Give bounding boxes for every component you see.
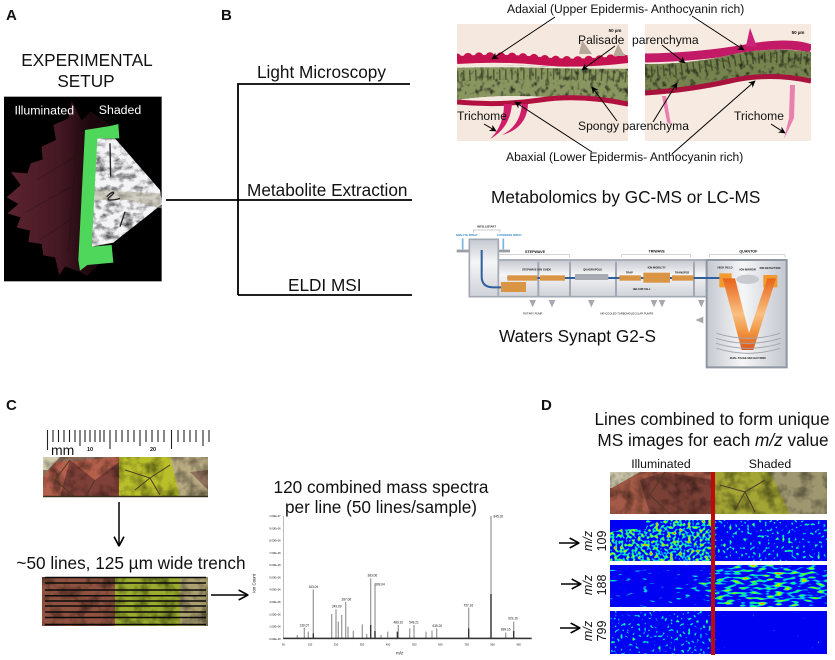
chart: mass spectrum: 7.00E+06	[269, 551, 281, 555]
chart: mass spectrum: 2.00E+06	[269, 612, 281, 616]
label: m/z 188: 188	[595, 575, 609, 595]
chart: mass spectrum: 757.16	[464, 603, 473, 607]
chart: mass spectrum: 350	[360, 642, 365, 646]
chart: mass spectrum: 9.00E+06	[269, 526, 281, 530]
chart: mass spectrum: 163.04	[309, 585, 318, 589]
scale bar right: 50 µm	[792, 30, 804, 35]
label: Waters Synapt G2-S: Waters Synapt G2-S	[499, 326, 656, 346]
label: shaded: Shaded	[749, 457, 791, 471]
heading: experimental setup: EXPERIMENTAL	[21, 50, 153, 70]
MS image m/z 188	[610, 565, 827, 607]
chart: mass spectrum	[252, 514, 532, 655]
label: m/z 188: m/z	[581, 574, 595, 595]
diagram: Waters Synapt G2-S instrument: STEPWAVE ION GUIDE	[522, 267, 551, 271]
diagram: Waters Synapt G2-S instrument: AIR-COOLED TURBOMOLECULAR PUMPS	[600, 312, 654, 316]
chart: mass spectrum: 850	[490, 642, 495, 646]
chart: mass spectrum: 1.00E+06	[269, 625, 281, 629]
chart: mass spectrum: 250	[334, 642, 339, 646]
micrograph annotation arrows	[484, 16, 785, 154]
micrograph annotation labels: Palisade	[578, 33, 625, 47]
ruler	[48, 430, 209, 458]
photo: half shaded leaf	[4, 97, 162, 281]
chart: mass spectrum: 750	[464, 642, 469, 646]
heading: lines combined: Lines combined to form unique	[594, 409, 830, 429]
diagram: Waters Synapt G2-S instrument: ION DETECTION	[760, 266, 780, 270]
ruler: 20	[150, 447, 156, 453]
heading: combined mass spectra: per line (50 lines/sample)	[285, 497, 477, 517]
chart: mass spectrum: 929.16	[508, 617, 518, 621]
panel label D: D	[541, 397, 552, 414]
chart: mass spectrum: 6.00E+06	[269, 563, 281, 567]
heading: combined mass spectra: 120 combined mass spectra	[274, 477, 489, 497]
diagram: Waters Synapt G2-S instrument: ROTARY PUMP	[523, 312, 542, 316]
diagram: Waters Synapt G2-S instrument: ION MIRROR	[740, 268, 756, 272]
diagram: Waters Synapt G2-S instrument: ANALYTE SPRAY	[456, 233, 478, 237]
ruler: 10	[87, 447, 93, 453]
ruler: mm	[51, 442, 74, 458]
photo: half shaded leaf: Illuminated	[15, 104, 74, 118]
diagram: Waters Synapt G2-S instrument: TRANSFER	[675, 270, 689, 274]
micrograph annotation labels: Trichome	[734, 109, 784, 123]
chart: mass spectrum: 1.00E+07	[269, 514, 281, 518]
chart: mass spectrum: 399.04	[375, 582, 385, 586]
chart: mass spectrum: 8.00E+06	[269, 539, 281, 543]
chart: mass spectrum: 383.06	[368, 573, 377, 577]
panel label C: C	[6, 397, 17, 414]
chart: mass spectrum: 130.07	[300, 624, 309, 628]
label: lines and trench width: ~50 lines, 125 µm wide trench	[16, 553, 246, 573]
diagram: Waters Synapt G2-S instrument: LOCKMASS SPRAY	[497, 233, 522, 237]
leaf section photo	[610, 472, 827, 514]
diagram: Waters Synapt G2-S instrument: QUANTOF	[739, 250, 758, 254]
ablated leaf section with trench lines	[42, 577, 208, 626]
diagram: Waters Synapt G2-S instrument: QUADRUPOLE	[583, 267, 602, 271]
label: m/z 109: 109	[595, 531, 609, 551]
label: illuminated: Illuminated	[631, 457, 691, 471]
MS image m/z 799	[610, 611, 827, 654]
diagram: Waters Synapt G2-S instrument: TRAP	[626, 270, 633, 274]
panel label B: B	[221, 7, 232, 24]
chart: mass spectrum: 650	[438, 642, 443, 646]
label: light microscopy: Light Microscopy	[257, 62, 386, 82]
chart: mass spectrum: 899.16	[501, 628, 511, 632]
chart: mass spectrum: 287.06	[342, 597, 351, 601]
arrow: section to trenches	[118, 502, 120, 546]
micrograph annotation labels: Abaxial (Lower Epidermis- Anthocyanin rich)	[506, 150, 743, 164]
micrograph annotation labels: Trichome	[457, 109, 507, 123]
diagram: Waters Synapt G2-S instrument: DUAL STAGE REFLECTRON	[730, 356, 766, 360]
arrow: m/z 188	[561, 583, 581, 585]
label: ELDI MSI: ELDI MSI	[288, 275, 362, 295]
micrograph annotation labels: parenchyma	[632, 33, 699, 47]
chart: mass spectrum: 549.21	[409, 621, 419, 625]
chart: mass spectrum: 950	[516, 642, 521, 646]
label: m/z 109: m/z	[581, 530, 595, 551]
heading: metabolomics: Metabolomics by GC-MS or LC-MS	[491, 187, 760, 207]
chart: mass spectrum: 249.09	[332, 605, 342, 609]
diagram: Waters Synapt G2-S instrument: HELIUM CELL	[633, 287, 651, 291]
heading: experimental setup: SETUP	[57, 71, 115, 91]
label: m/z 799: 799	[595, 621, 609, 641]
chart: mass spectrum: m/z	[396, 650, 403, 655]
label: m/z 799: m/z	[581, 620, 595, 641]
arrow: trenches to spectrum	[211, 594, 248, 596]
chart: mass spectrum: 150	[308, 642, 313, 646]
chart: mass spectrum: 50	[282, 642, 285, 646]
scale bar left: 50 µm	[609, 28, 621, 33]
diagram: Waters Synapt G2-S instrument	[456, 225, 787, 367]
micrograph annotation labels	[457, 2, 784, 164]
panel B: micrographs	[457, 2, 811, 164]
diagram: Waters Synapt G2-S instrument: STEPWAVE	[525, 250, 546, 254]
chart: mass spectrum: 550	[412, 642, 417, 646]
divider: illuminated and shaded boundary	[711, 472, 715, 655]
chart: mass spectrum: 635.20	[433, 624, 442, 628]
arrow: m/z 799	[560, 627, 580, 629]
chart: mass spectrum: 3.00E+06	[269, 600, 281, 604]
panel D: MS images	[559, 409, 835, 655]
micrograph: left section	[457, 24, 628, 141]
arrow: m/z 109	[559, 542, 579, 544]
label: metabolite extraction: Metabolite Extraction	[247, 180, 408, 200]
chart: mass spectrum: 489.10	[394, 620, 403, 624]
leaf section photo	[43, 457, 208, 497]
panel C: ablation workflow	[16, 430, 248, 626]
micrograph: right section	[645, 24, 811, 141]
MS image m/z 109	[610, 520, 827, 561]
diagram: Waters Synapt G2-S instrument: ION MOBILITY	[648, 265, 666, 269]
chart: mass spectrum: 5.00E+06	[269, 575, 281, 579]
micrograph annotation labels: Spongy parenchyma	[578, 119, 689, 133]
chart: mass spectrum: 0.00E+00	[269, 637, 281, 641]
panel A: experimental setup	[4, 50, 162, 281]
panel label A: A	[6, 7, 17, 24]
diagram: Waters Synapt G2-S instrument: HIGH FIELD	[717, 265, 733, 269]
connector tree linking A to the three methods	[166, 84, 412, 295]
chart: mass spectrum: 845.20	[494, 515, 503, 519]
diagram: Waters Synapt G2-S instrument: INTELLISTART	[477, 225, 496, 229]
photo: half shaded leaf: Shaded	[99, 103, 141, 117]
chart: mass spectrum: Ion Count	[252, 573, 257, 593]
heading: lines combined: MS images for each m/z value	[597, 430, 829, 450]
diagram: Waters Synapt G2-S instrument: TRIWAVE	[648, 250, 665, 254]
micrograph annotation labels: Adaxial (Upper Epidermis- Anthocyanin rich)	[507, 2, 744, 16]
chart: mass spectrum: 450	[386, 642, 391, 646]
chart: mass spectrum: 4.00E+06	[269, 588, 281, 592]
